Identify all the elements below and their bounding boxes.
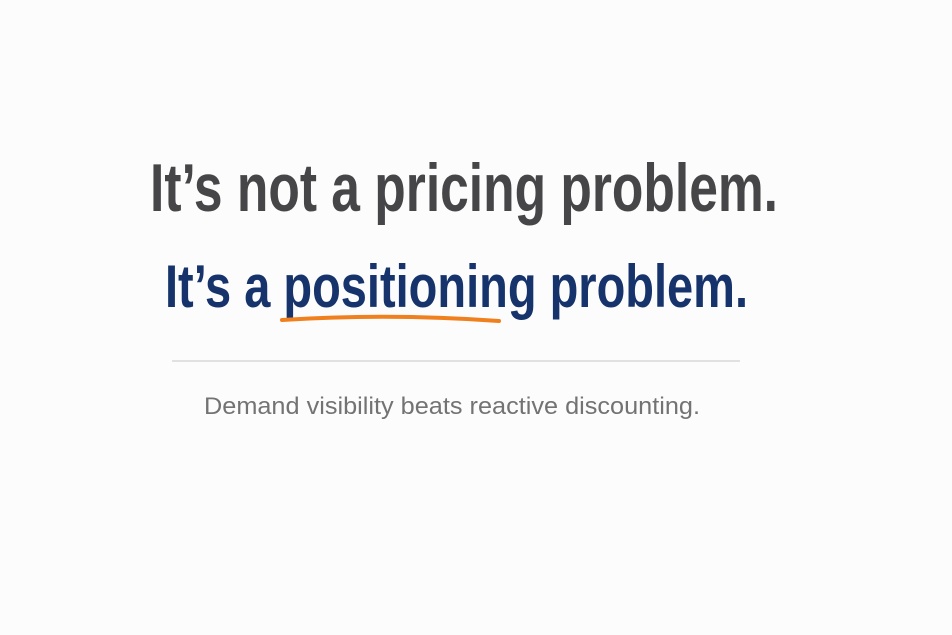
orange underline [282, 317, 499, 321]
subtitle: Demand visibility beats reactive discounting. [204, 393, 700, 420]
headline line 2: It’s a positioning problem. [165, 253, 748, 320]
